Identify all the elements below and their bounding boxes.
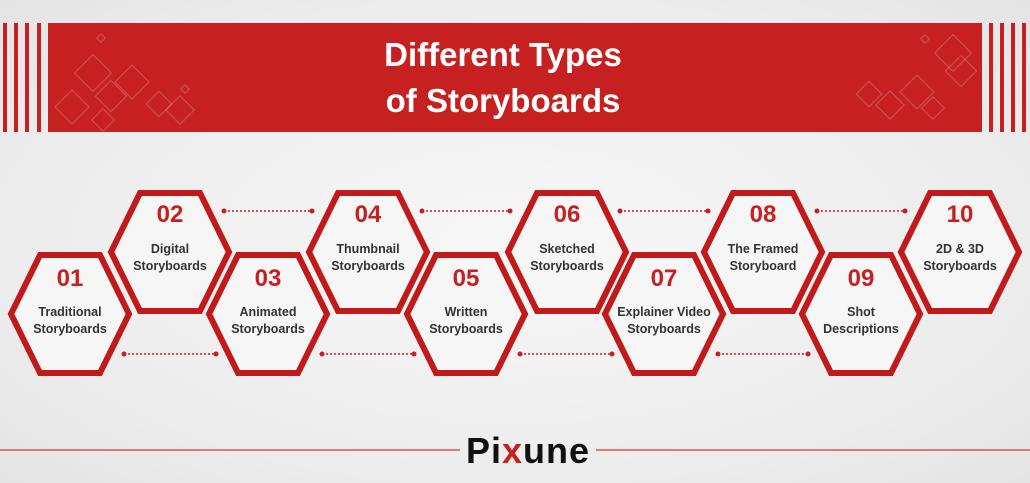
hexagon 06: [508, 193, 626, 311]
title: of Storyboards: [386, 82, 620, 119]
footer logo: Pixune: [466, 430, 590, 471]
hexagon 07: Storyboards: [627, 322, 701, 336]
hexagon 09: Descriptions: [823, 322, 899, 336]
hexagon 01: 01: [57, 265, 83, 292]
hexagon 06: Storyboards: [530, 259, 604, 273]
hexagon 10: [901, 193, 1019, 311]
hexagon 04: 04: [355, 201, 382, 228]
hexagon 02: Digital: [151, 242, 189, 256]
hexagon 07: [605, 255, 723, 373]
hexagon 08: [704, 193, 822, 311]
hexagon 05: Written: [445, 305, 487, 319]
hexagon 03: Storyboards: [231, 322, 305, 336]
hexagon 09: 09: [848, 265, 874, 292]
hexagon 01: Traditional: [38, 305, 102, 319]
hexagon 08: The Framed: [728, 242, 798, 256]
hexagon 10: Storyboards: [923, 259, 997, 273]
hexagon 09: [802, 255, 920, 373]
hexagon 08: 08: [750, 201, 776, 228]
hexagon 05: Storyboards: [429, 322, 503, 336]
hexagon 03: [209, 255, 327, 373]
hexagon 05: [407, 255, 525, 373]
hexagon 02: [111, 193, 229, 311]
hexagon 03: 03: [255, 265, 281, 292]
hexagon 10: 10: [947, 201, 973, 228]
hexagon 06: 06: [554, 201, 580, 228]
hexagon 06: Sketched: [539, 242, 595, 256]
hexagon 04: [309, 193, 427, 311]
hexagon 02: Storyboards: [133, 259, 207, 273]
hexagon 04: Thumbnail: [336, 242, 400, 256]
hexagon 07: Explainer Video: [617, 305, 711, 319]
hexagon 02: 02: [157, 201, 183, 228]
title: [384, 36, 622, 119]
hexagon 04: Storyboards: [331, 259, 405, 273]
hexagon 05: 05: [453, 265, 479, 292]
title: Different Types: [384, 36, 622, 73]
hexagon 01: Storyboards: [33, 322, 107, 336]
hexagon 10: 2D & 3D: [936, 242, 984, 256]
hexagon 01: [11, 255, 129, 373]
hexagon 08: Storyboard: [730, 259, 796, 273]
hexagon 07: 07: [651, 265, 677, 292]
banner: [3, 23, 1026, 132]
hexagon 03: Animated: [240, 305, 296, 319]
connectors: [122, 208, 908, 356]
hexagon 09: Shot: [847, 305, 876, 319]
